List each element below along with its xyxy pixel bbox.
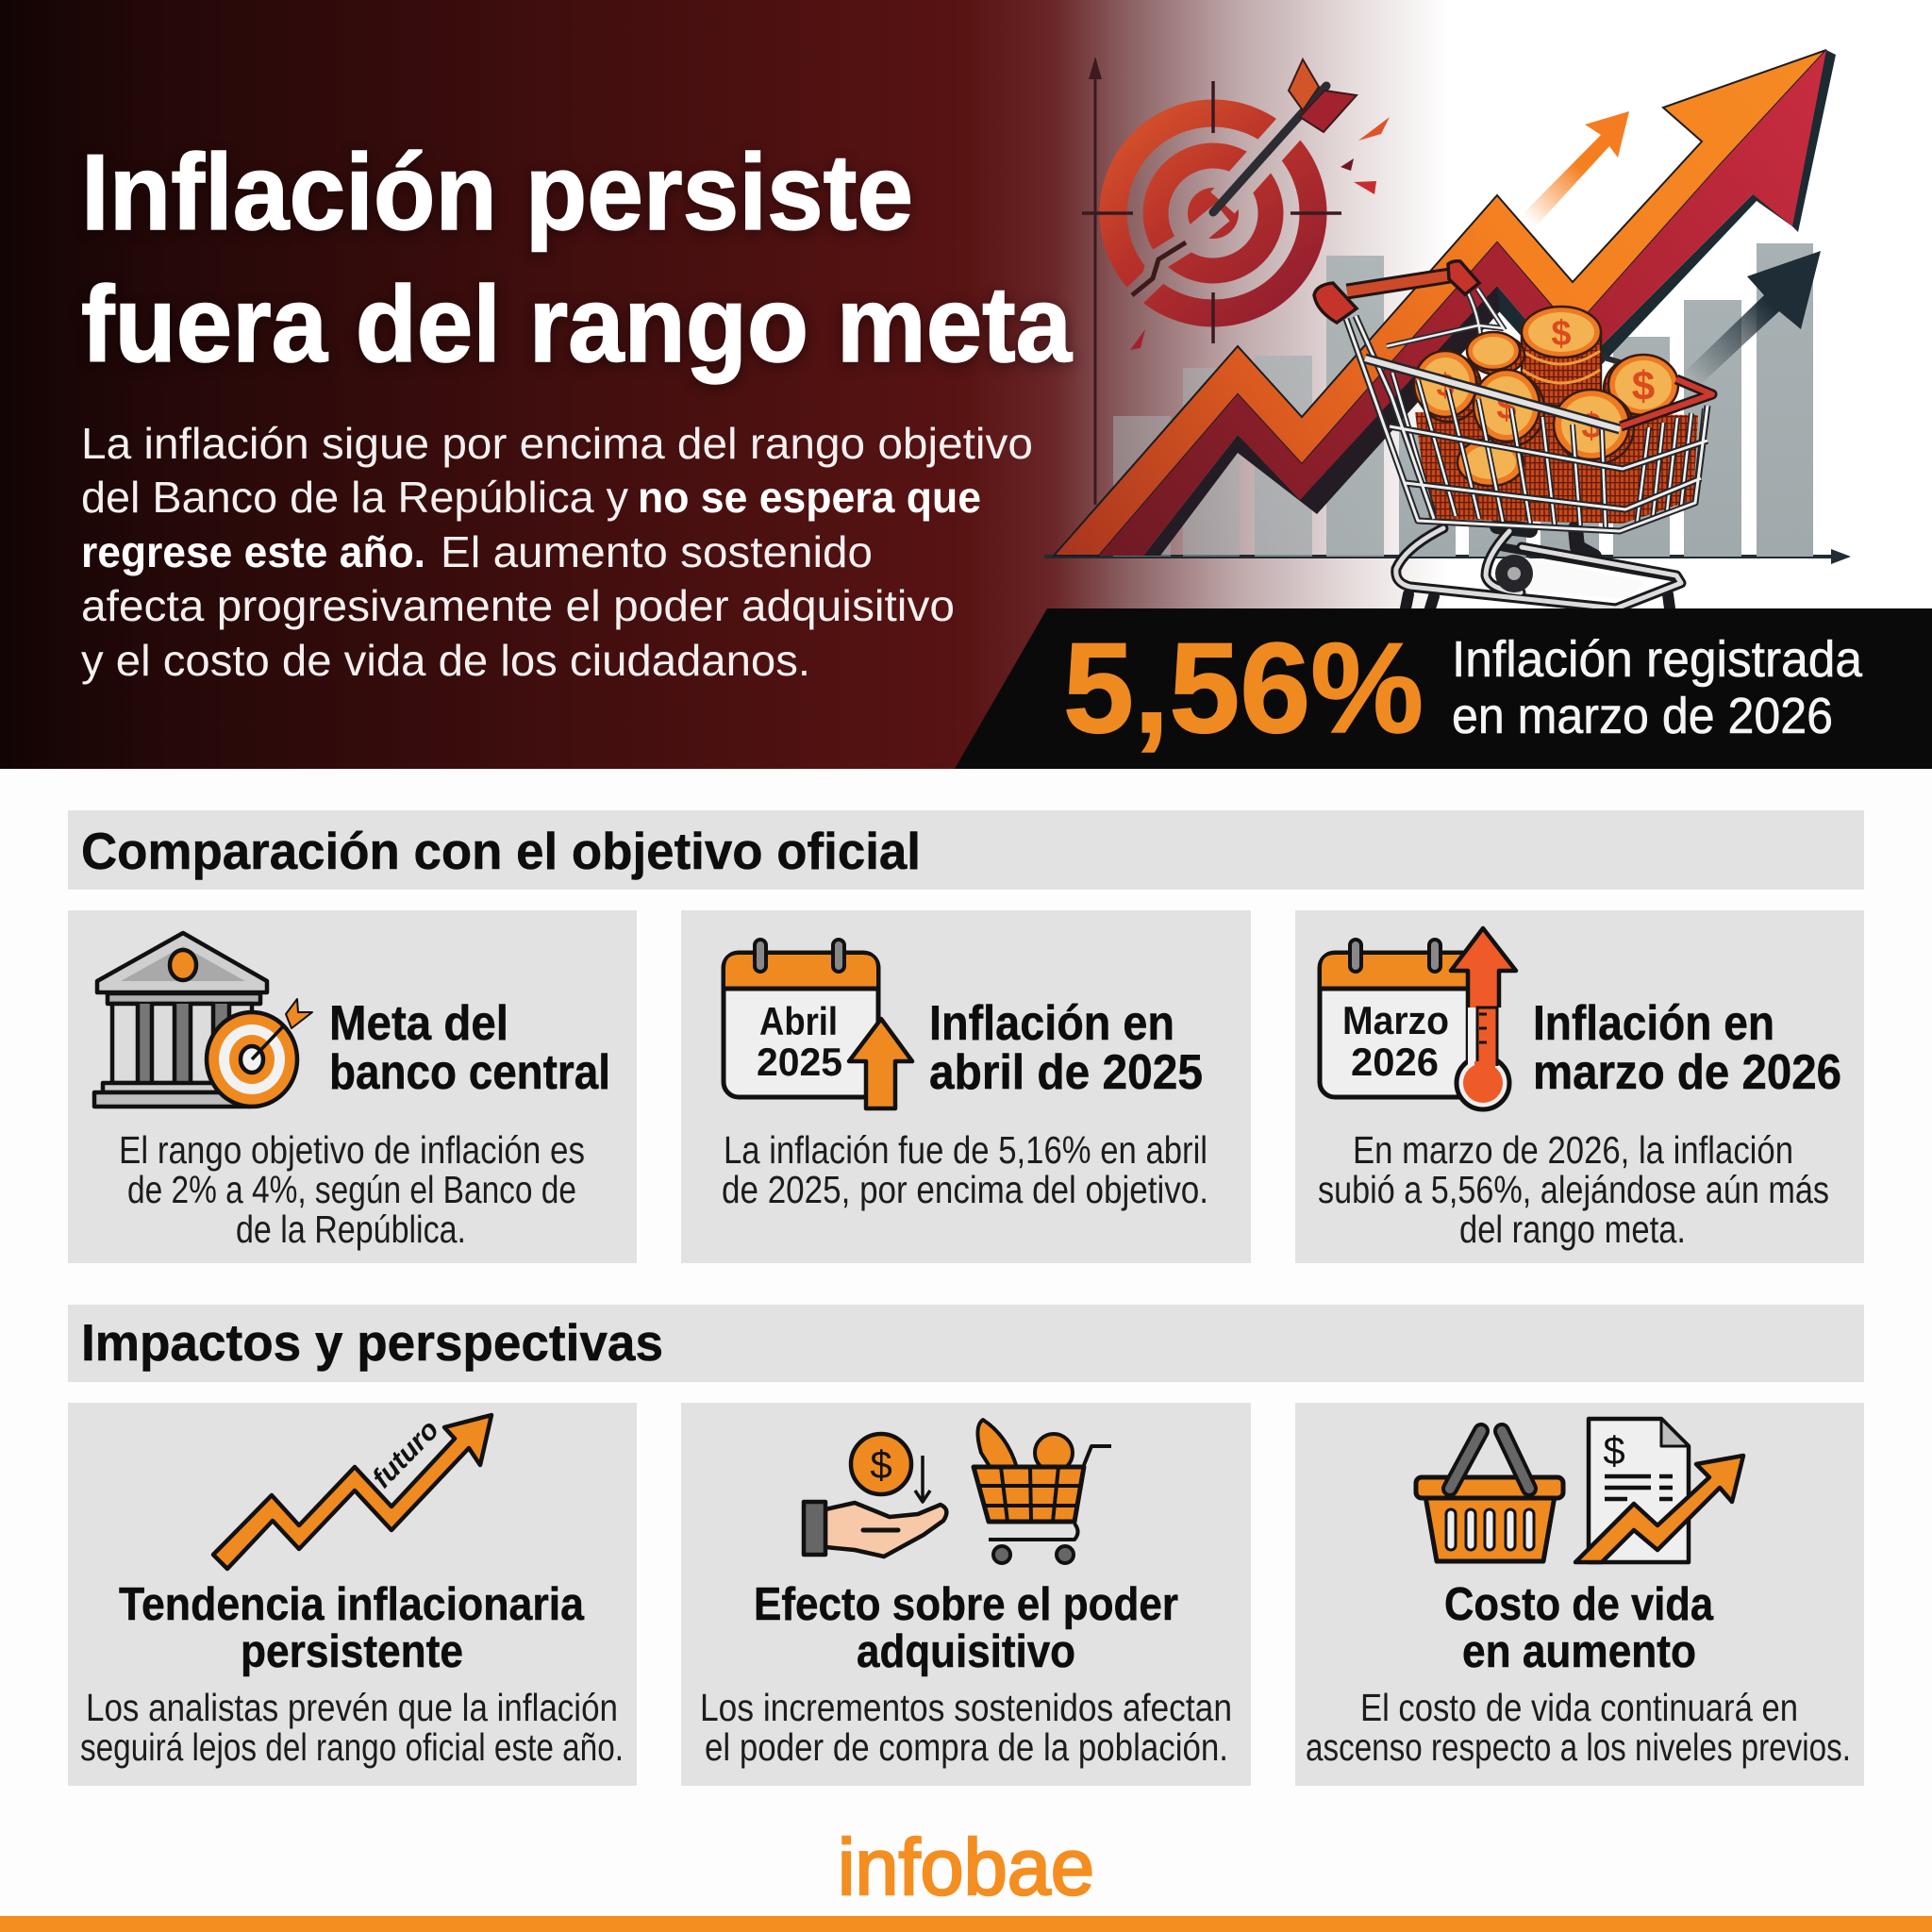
black stat band xyxy=(955,608,1932,769)
card title: Meta del xyxy=(329,996,508,1051)
card text: de 2% a 4%, según el Banco de xyxy=(127,1168,576,1211)
intro paragraph: afecta progresivamente el poder adquisitivo xyxy=(81,581,955,630)
card title xyxy=(1444,1579,1714,1677)
icon: calendar with thermometer: 2026 xyxy=(1351,1040,1439,1084)
card title xyxy=(329,996,610,1100)
card text: La inflación fue de 5,16% en abril xyxy=(724,1128,1208,1172)
card title: Efecto sobre el poder xyxy=(754,1579,1178,1630)
card text: Los analistas prevén que la inflación xyxy=(86,1686,618,1729)
card title: Costo de vida xyxy=(1444,1579,1714,1630)
hero chart axes xyxy=(1044,57,1851,564)
header banner xyxy=(0,0,1932,769)
coin dollar signs: $ xyxy=(1632,363,1655,409)
intro paragraph: La inflación sigue por encima del rango objetivo xyxy=(81,419,1033,468)
card title: adquisitivo xyxy=(857,1626,1075,1677)
coin dollar signs xyxy=(1437,314,1655,446)
cart lower frame xyxy=(1396,526,1681,608)
big zigzag arrow xyxy=(1054,50,1836,556)
card text: seguirá lejos del rango oficial este año. xyxy=(80,1725,624,1769)
footer bar xyxy=(0,1916,1932,1932)
intro paragraph: y el costo de vida de los ciudadanos. xyxy=(81,636,810,685)
panel: marzo 2026 xyxy=(1295,910,1864,1263)
stat label: en marzo de 2026 xyxy=(1452,688,1833,744)
icon: calendar with thermometer: Marzo xyxy=(1342,998,1449,1042)
section heading: comparación xyxy=(68,810,1864,890)
cart wires xyxy=(1392,373,1705,528)
panel: poder adquisitivo xyxy=(681,1403,1251,1786)
hero chart bars xyxy=(1113,243,1813,557)
card title xyxy=(1533,996,1841,1100)
icon: basket xyxy=(1416,1431,1563,1561)
icon: grocery cart xyxy=(974,1420,1111,1563)
icon: bill with rising arrow: $ xyxy=(1603,1428,1625,1473)
card text: El costo de vida continuará en xyxy=(1360,1686,1798,1729)
logo: infobae: infobae xyxy=(838,1823,1094,1911)
icon: target with arrow xyxy=(1082,59,1390,350)
icon: bill with rising arrow xyxy=(1575,1419,1743,1562)
back cart tubes xyxy=(1387,289,1676,379)
cart handle xyxy=(1314,261,1479,323)
title xyxy=(81,133,1073,385)
card title: persistente xyxy=(241,1626,463,1677)
card text: El rango objetivo de inflación es xyxy=(119,1128,585,1172)
stat label xyxy=(1452,631,1863,744)
intro paragraph: El aumento sostenido xyxy=(441,527,873,576)
panel: meta del banco central xyxy=(68,910,637,1263)
card title: marzo de 2026 xyxy=(1533,1045,1841,1100)
icon: bank with target xyxy=(94,933,312,1107)
card text: subió a 5,56%, alejándose aún más xyxy=(1318,1168,1829,1211)
section heading: comparación: Comparación con el objetivo oficial xyxy=(81,822,921,880)
coin dollar signs: $ xyxy=(1551,314,1572,354)
card title: en aumento xyxy=(1462,1626,1696,1677)
card text xyxy=(1318,1128,1829,1251)
coin pile xyxy=(1415,412,1698,524)
stat value: 5,56% xyxy=(1063,616,1424,759)
icon: hand with coin xyxy=(804,1434,946,1557)
card title: Tendencia inflacionaria xyxy=(119,1579,585,1630)
coin dollar signs: $ xyxy=(1581,407,1602,446)
card title: abril de 2025 xyxy=(929,1045,1203,1100)
intro paragraph: no se espera que xyxy=(638,473,981,522)
card text: de 2025, por encima del objetivo. xyxy=(722,1168,1208,1211)
card text: del rango meta. xyxy=(1459,1208,1686,1251)
title: Inflación persiste xyxy=(81,133,913,253)
card text: En marzo de 2026, la inflación xyxy=(1353,1128,1793,1172)
icon: futuro zigzag arrow xyxy=(213,1414,491,1569)
icon: calendar with up arrow: Abril xyxy=(759,999,838,1043)
card text: de la República. xyxy=(236,1208,466,1251)
stat label: Inflación registrada xyxy=(1452,631,1863,688)
coin stack xyxy=(1522,307,1601,406)
icon: hand with coin: $ xyxy=(870,1442,892,1487)
section heading: impactos: Impactos y perspectivas xyxy=(81,1313,663,1372)
title: fuera del rango meta xyxy=(81,265,1073,385)
icon: futuro zigzag arrow: futuro xyxy=(366,1414,445,1494)
intro paragraph: del Banco de la República y xyxy=(81,473,628,522)
icon: shopping cart with coins xyxy=(1314,261,1712,608)
intro paragraph: regrese este año. xyxy=(81,527,425,576)
card title xyxy=(754,1579,1178,1677)
card text xyxy=(1306,1686,1851,1769)
icon: calendar with up arrow xyxy=(724,940,912,1108)
small dark rising arrow xyxy=(1683,251,1821,387)
panel: tendencia xyxy=(68,1403,637,1786)
card title: Inflación en xyxy=(1533,996,1774,1051)
icon: calendar with up arrow: 2025 xyxy=(757,1040,842,1084)
card text: el poder de compra de la población. xyxy=(705,1725,1228,1769)
coin dollar signs: $ xyxy=(1437,368,1455,404)
card text xyxy=(722,1128,1208,1211)
coin dollar signs: $ xyxy=(1496,388,1517,427)
section heading: impactos xyxy=(68,1305,1864,1382)
card title: Inflación en xyxy=(929,996,1174,1051)
panel: costo de vida xyxy=(1295,1403,1864,1786)
loose coins xyxy=(1414,332,1678,486)
card text xyxy=(80,1686,624,1769)
card title xyxy=(929,996,1203,1100)
intro paragraph xyxy=(81,419,1033,685)
panel: abril 2025 xyxy=(681,910,1251,1263)
card text xyxy=(119,1128,585,1251)
icon: calendar with thermometer xyxy=(1320,928,1516,1109)
small orange rising arrow xyxy=(1522,111,1629,226)
card title xyxy=(119,1579,585,1677)
card text xyxy=(700,1686,1232,1769)
card title: banco central xyxy=(329,1045,610,1100)
cart frame tubes xyxy=(1346,316,1712,531)
card text: Los incrementos sostenidos afectan xyxy=(700,1686,1232,1729)
